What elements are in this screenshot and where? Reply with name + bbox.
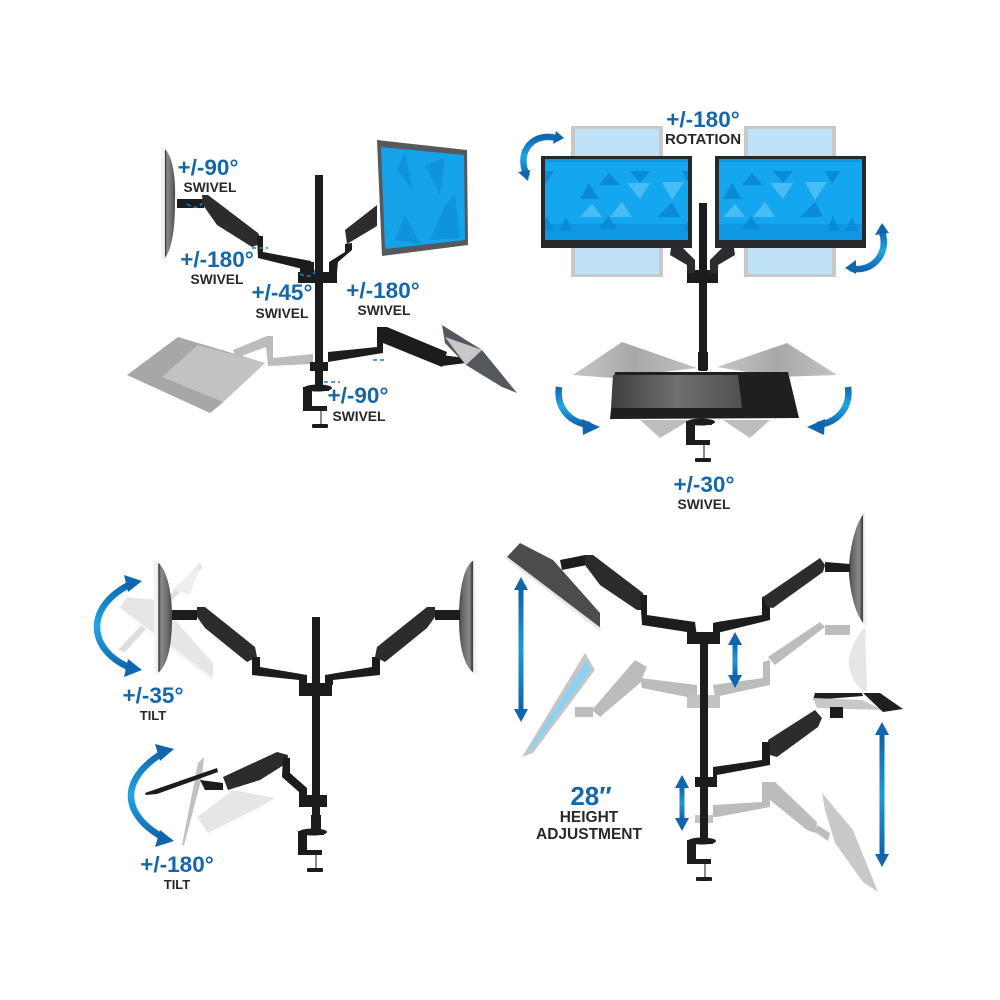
lower right arm and tray: [310, 325, 517, 393]
left tilted monitor: [507, 543, 600, 630]
label +/-180 swivel right: SWIVEL: [358, 303, 410, 318]
upper arms: [560, 555, 850, 644]
label +/-180 swivel right: +/-180°: [346, 278, 420, 303]
label +/-30 swivel: +/-30°: [674, 472, 734, 497]
right monitor: [377, 140, 468, 256]
pole: [312, 617, 320, 833]
label +/-180 swivel left: [180, 247, 254, 287]
desk clamp: [303, 384, 332, 428]
keyboard tray raised: [813, 693, 903, 718]
lowered ghost arms and monitors: [522, 622, 878, 892]
height arrow centre: [728, 632, 742, 688]
keyboard tray ghosts: [573, 342, 837, 438]
panel: tilt ranges: [97, 560, 477, 892]
rotated ghost monitors: [571, 126, 836, 277]
label rotation: [665, 107, 741, 148]
upper arms: [172, 607, 460, 696]
left side-on monitor: [153, 560, 172, 675]
label +/-35 tilt: TILT: [140, 708, 166, 723]
panel: swivel ranges: [127, 140, 517, 428]
pole and hub: [670, 203, 735, 371]
white monitor edge: [506, 556, 601, 631]
rotation arrow left: [518, 131, 564, 181]
right monitor arm: [329, 205, 377, 272]
label +/-90 swivel: SWIVEL: [184, 180, 236, 195]
label +/-35 tilt: +/-35°: [123, 683, 183, 708]
label +/-90 swivel bottom: SWIVEL: [333, 409, 385, 424]
rotation arrow right: [845, 223, 889, 274]
height arrow clamp: [675, 775, 689, 831]
label +/-180 swivel left: +/-180°: [180, 247, 254, 272]
vertical tray ghost: [182, 757, 204, 845]
label 28 inch height adjustment: 28″: [570, 781, 612, 811]
label +/-180 swivel left: SWIVEL: [191, 272, 243, 287]
keyboard tray ghost: [197, 790, 275, 833]
desk clamp: [298, 828, 327, 872]
label +/-180 tilt: [140, 852, 214, 892]
tilt arrow upper: [97, 575, 142, 677]
lower arm and tilted tray: [145, 752, 327, 831]
label 28 inch height adjustment: HEIGHT: [560, 809, 619, 826]
label +/-180 tilt: TILT: [164, 877, 190, 892]
label +/-45 swivel: SWIVEL: [256, 306, 308, 321]
height arrow tray right: [875, 722, 889, 867]
label +/-45 swivel: +/-45°: [252, 280, 312, 305]
tilted ghost monitors: [118, 563, 213, 680]
label +/-35 tilt: [123, 683, 183, 723]
label +/-90 swivel bottom: +/-90°: [328, 383, 388, 408]
label +/-90 swivel bottom: [328, 383, 388, 424]
label +/-180 swivel right: [346, 278, 420, 318]
right side-on monitor: [459, 560, 477, 675]
keyboard tray: [610, 372, 799, 419]
label 28 inch height adjustment: ADJUSTMENT: [536, 826, 642, 843]
panel: height adjustment: [506, 512, 903, 892]
swivel arrow left: [559, 387, 600, 435]
desk clamp: [686, 418, 715, 462]
swivel arrow right: [807, 387, 848, 435]
right side-on monitor: [849, 512, 867, 627]
left side-on monitor: [161, 147, 175, 261]
label +/-90 swivel: [178, 155, 238, 195]
label rotation: +/-180°: [666, 107, 740, 132]
label +/-30 swivel: [674, 472, 734, 512]
desk clamp: [687, 838, 716, 881]
label +/-90 swivel: +/-90°: [178, 155, 238, 180]
dual monitors front: [541, 156, 866, 248]
label +/-30 swivel: SWIVEL: [678, 497, 730, 512]
small swivel markers: [187, 203, 386, 382]
pole: [700, 643, 708, 840]
support pole: [315, 175, 323, 390]
left monitor arm: [177, 195, 337, 283]
tilt arrow lower: [131, 744, 174, 847]
label rotation: ROTATION: [665, 131, 741, 148]
height arrow monitor left: [514, 577, 528, 722]
label +/-45 swivel: [252, 280, 312, 321]
keyboard tray ghost: [127, 336, 313, 413]
panel: rotation and keyboard swivel: [518, 107, 889, 512]
label +/-180 tilt: +/-180°: [140, 852, 214, 877]
label 28 inch height adjustment: [536, 781, 642, 843]
lower arm: [695, 710, 822, 787]
